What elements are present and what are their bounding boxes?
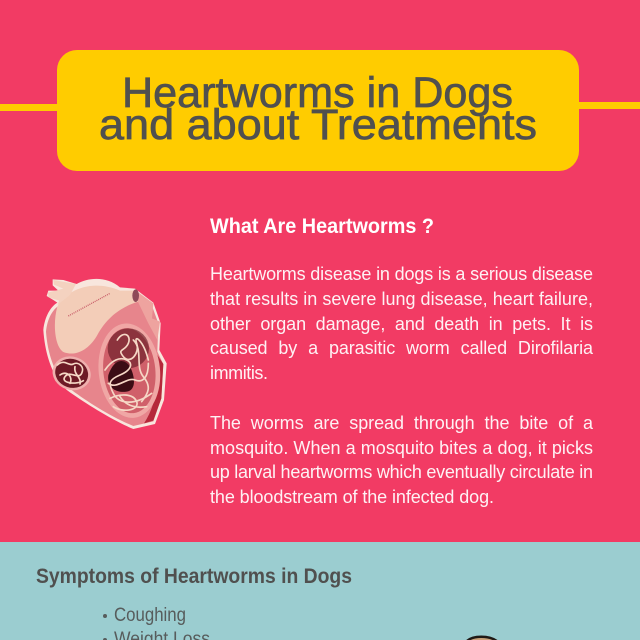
text block: what are heartworms, first paragraph <box>210 264 594 383</box>
text block: what are heartworms, first paragraph: Heartworms disease in dogs is a serious disease <box>210 264 593 284</box>
text block: what are heartworms, first paragraph: caused by a parasitic worm called Dirofilaria <box>210 338 594 358</box>
panel: symptoms <box>0 542 640 640</box>
icon: heart with worms <box>43 279 167 429</box>
title connector line left <box>0 104 60 111</box>
text block: what are heartworms, second paragraph: up larval heartworms which eventually circulate in <box>210 462 593 482</box>
text block: what are heartworms, second paragraph: the bloodstream of the infected dog. <box>210 487 494 507</box>
text block: what are heartworms, first paragraph: immitis. <box>210 363 268 383</box>
text block: what are heartworms, first paragraph: that results in severe lung disease, heart failure, <box>210 289 593 309</box>
symptoms list: Coughing <box>114 605 186 626</box>
text block: what are heartworms, first paragraph: other organ damage, and death in pets. It is <box>210 314 593 334</box>
title banner <box>57 50 579 171</box>
heading: What Are Heartworms: What Are Heartworms ? <box>210 215 434 238</box>
heading: symptoms of heartworms: Symptoms of Heartworms in Dogs <box>36 565 352 588</box>
icon: dog head, cropped top <box>466 637 498 640</box>
text block: what are heartworms, second paragraph: mosquito. When a mosquito bites a dog, it picks <box>210 438 593 458</box>
text block: what are heartworms, second paragraph <box>210 413 594 507</box>
symptoms list <box>103 605 210 640</box>
text block: what are heartworms, second paragraph: The worms are spread through the bite of a <box>210 413 594 433</box>
title banner: Heartworms in Dogs <box>122 69 513 117</box>
title banner: and about Treatments <box>99 101 537 149</box>
title connector line right <box>576 102 640 109</box>
